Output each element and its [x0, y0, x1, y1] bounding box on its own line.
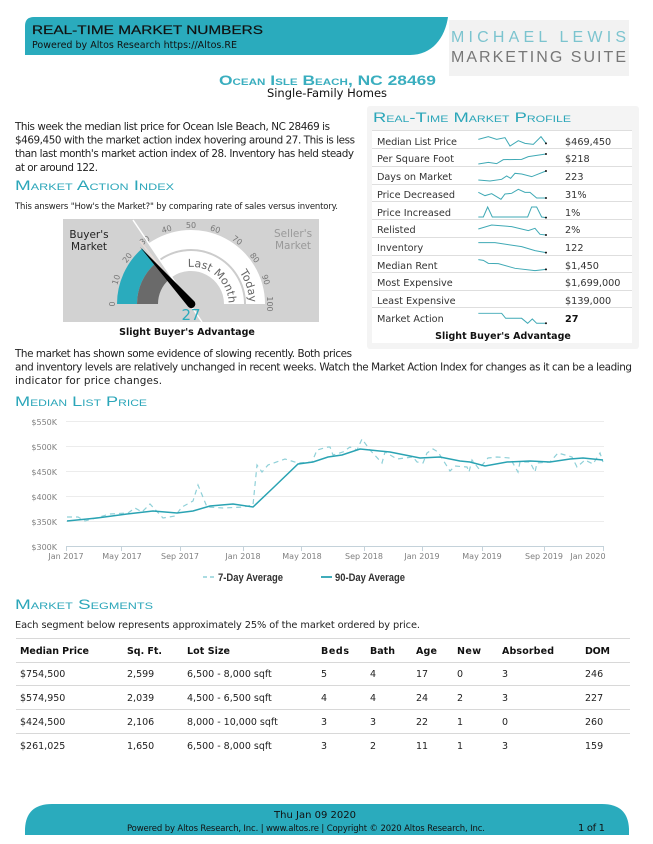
line chart: median list price: $550K [31, 418, 58, 427]
table: market segments [16, 638, 630, 752]
table rules and rows: $218 [565, 154, 590, 165]
table: market segments: 3 [370, 717, 376, 728]
table rules and rows: $139,000 [565, 296, 611, 307]
table: market segments: 0 [457, 669, 463, 680]
line chart: median list price: Sep 2019 [525, 552, 563, 561]
market commentary paragraph: and inventory levels are relatively unchanged in recent weeks. Watch the Market Action Index for changes as it can be a leading [15, 362, 632, 374]
table: market segments: $261,025 [20, 741, 65, 752]
table: market segments: 24 [416, 693, 428, 704]
table: market segments: 2,039 [127, 693, 154, 704]
table: market segments: 3 [502, 741, 508, 752]
gauge chart: market action index: Market [71, 241, 107, 253]
table: market segments: Age [416, 646, 437, 657]
gauge chart: market action index: 80 [248, 251, 261, 265]
line chart: median list price: $350K [31, 518, 58, 527]
heading: median list price: Median List Price [15, 394, 147, 409]
footer: Thu Jan 09 2020 [273, 810, 356, 821]
table rules and rows: $469,450 [565, 137, 611, 148]
footer: Powered by Altos Research, Inc. | www.altos.re | Copyright © 2020 Altos Research, Inc. [127, 824, 485, 834]
table: market segments: 246 [585, 669, 603, 680]
footer [25, 804, 629, 835]
market commentary paragraph: indicator for price changes. [15, 375, 162, 387]
table rules and rows: 27 [565, 314, 578, 325]
table: market segments: 3 [321, 741, 327, 752]
table: market segments: 1 [457, 741, 463, 752]
gauge chart: market action index: 0 [108, 301, 117, 307]
gauge chart: market action index [63, 219, 319, 324]
line chart: median list price: May 2017 [102, 552, 142, 561]
table: market segments: 1,650 [127, 741, 154, 752]
table: market segments: Lot Size [187, 646, 230, 657]
line chart: median list price: $300K [31, 543, 58, 552]
gauge chart: market action index: 100 [265, 296, 274, 312]
table: market segments: New [457, 646, 481, 657]
table: market segments: 6,500 - 8,000 sqft [187, 669, 272, 680]
panel verdict: Slight Buyer's Advantage [435, 331, 571, 342]
segments description: Each segment below represents approximately 25% of the market ordered by price. [15, 620, 420, 631]
table rules and rows [372, 130, 632, 325]
table: market segments: 2,599 [127, 669, 154, 680]
table: market segments: 2,106 [127, 717, 154, 728]
table: market segments: 2 [457, 693, 463, 704]
gauge chart: market action index: Last Month [188, 258, 236, 302]
heading: market segments: Market Segments [15, 597, 153, 612]
intro paragraph: This week the median list price for Ocean Isle Beach, NC 28469 is [14, 121, 330, 133]
table: market segments: Median Price [20, 646, 89, 657]
gauge chart: market action index: 20 [121, 251, 134, 265]
table rules and rows: 223 [565, 172, 584, 183]
table: market segments: 227 [585, 693, 603, 704]
heading: real-time market profile: Real-Time Market Profile [373, 110, 571, 125]
intro paragraph: at or around 122. [15, 162, 98, 174]
line chart: median list price: Jan 2019 [403, 552, 440, 561]
table: market segments: 17 [416, 669, 428, 680]
logo: Michael Lewis Marketing Suite: MARKETING SUITE [451, 49, 626, 66]
header banner: Powered by Altos Research https://Altos.RE [32, 40, 237, 51]
gauge chart: market action index: 40 [161, 223, 173, 235]
table: market segments: Beds [321, 646, 349, 657]
gauge chart: market action index: Buyer's [69, 229, 109, 241]
gauge chart: market action index: 10 [110, 274, 122, 286]
table rules and rows: 122 [565, 243, 584, 254]
table rules and rows: Per Square Foot [377, 154, 454, 165]
header banner [25, 17, 448, 55]
line chart: median list price: Sep 2018 [345, 552, 383, 561]
table: market segments: Sq. Ft. [127, 646, 162, 657]
gauge description: This answers "How's the Market?" by comparing rate of sales versus inventory. [14, 202, 338, 212]
market commentary paragraph: The market has shown some evidence of slowing recently. Both prices [14, 348, 352, 360]
table rules and rows: Median Rent [377, 261, 438, 272]
table: market segments: 4,500 - 6,500 sqft [187, 693, 272, 704]
table rules and rows: 2% [565, 225, 580, 236]
table: market segments: $574,950 [20, 693, 65, 704]
gauge chart: market action index: 50 [186, 221, 196, 230]
gauge chart: market action index: 60 [209, 223, 221, 235]
sparklines [478, 137, 547, 324]
table rules and rows: Price Increased [377, 208, 451, 219]
90-day average series [67, 449, 603, 521]
table: market segments: 1 [457, 717, 463, 728]
table: market segments: Bath [370, 646, 395, 657]
table: market segments: 4 [321, 693, 327, 704]
table rules and rows: 1% [565, 208, 580, 219]
gauge chart: market action index: 90 [260, 274, 272, 286]
table: market segments: 4 [370, 693, 376, 704]
chart legend: 90-Day Average [335, 572, 405, 584]
line chart: median list price: Sep 2017 [161, 552, 199, 561]
gauge chart: market action index: 70 [230, 234, 244, 247]
line chart: median list price: Jan 2020 [569, 552, 606, 561]
header banner: REAL-TIME MARKET NUMBERS [32, 23, 263, 37]
table rules and rows: 31% [565, 190, 587, 201]
intro paragraph: than last month's market action index of 28. Inventory has held steady [15, 148, 354, 160]
table: market segments: DOM [585, 646, 610, 657]
table rules and rows: $1,699,000 [565, 278, 620, 289]
table: market segments: 6,500 - 8,000 sqft [187, 741, 272, 752]
subtitle: property type: Single-Family Homes [267, 86, 387, 100]
gauge chart: market action index: Today [241, 268, 256, 302]
table: market segments: 159 [585, 741, 603, 752]
panel: real-time market profile [367, 106, 639, 349]
table rules and rows: Price Decreased [377, 190, 455, 201]
table rules and rows: Days on Market [377, 172, 452, 183]
line chart: median list price: $450K [31, 468, 58, 477]
chart legend [203, 572, 405, 584]
gauge chart: market action index: 27 [181, 306, 201, 324]
gauge chart: market action index: 30 [138, 234, 152, 247]
table: market segments: 5 [321, 669, 327, 680]
line chart: median list price: May 2019 [462, 552, 502, 561]
table rules and rows: Relisted [377, 225, 416, 236]
heading: market action index: Market Action Index [15, 178, 174, 193]
line chart: median list price: Jan 2017 [47, 552, 84, 561]
market commentary paragraph [14, 348, 632, 387]
7-day average series [67, 439, 603, 521]
table rules and rows: Least Expensive [377, 296, 456, 307]
table: market segments: 4 [370, 669, 376, 680]
table rules and rows: $1,450 [565, 261, 599, 272]
footer: 1 of 1 [578, 823, 605, 834]
logo: Michael Lewis Marketing Suite: MICHAEL LEWIS [451, 29, 626, 46]
line chart: median list price: May 2018 [282, 552, 322, 561]
intro paragraph [14, 121, 355, 174]
table: market segments: 3 [502, 693, 508, 704]
table: market segments: $754,500 [20, 669, 65, 680]
line chart: median list price: $400K [31, 493, 58, 502]
table rules and rows: Median List Price [377, 137, 457, 148]
table: market segments: $424,500 [20, 717, 65, 728]
table: market segments: 3 [321, 717, 327, 728]
intro paragraph: $469,450 with the market action index hovering around 27. This is less [15, 134, 355, 146]
line chart: median list price: $500K [31, 443, 58, 452]
table: market segments: 8,000 - 10,000 sqft [187, 717, 278, 728]
logo: Michael Lewis Marketing Suite [449, 20, 629, 76]
title: location: Ocean Isle Beach, NC 28469 [219, 73, 436, 88]
gauge chart: market action index: Market [275, 240, 311, 252]
table: market segments: 260 [585, 717, 603, 728]
table rules and rows: Most Expensive [377, 278, 453, 289]
table: market segments: 11 [416, 741, 428, 752]
chart legend: 7-Day Average [218, 572, 283, 584]
gauge verdict: Slight Buyer's Advantage [119, 327, 255, 338]
table: market segments: Absorbed [502, 646, 554, 657]
line chart: median list price: Jan 2018 [224, 552, 261, 561]
table: market segments: 3 [502, 669, 508, 680]
table: market segments: 2 [370, 741, 376, 752]
table: market segments: 22 [416, 717, 428, 728]
table rules and rows: Inventory [377, 243, 424, 254]
table: market segments: 0 [502, 717, 508, 728]
line chart: median list price [31, 418, 606, 561]
gauge chart: market action index: Seller's [274, 228, 312, 240]
table rules and rows: Market Action [377, 314, 444, 325]
